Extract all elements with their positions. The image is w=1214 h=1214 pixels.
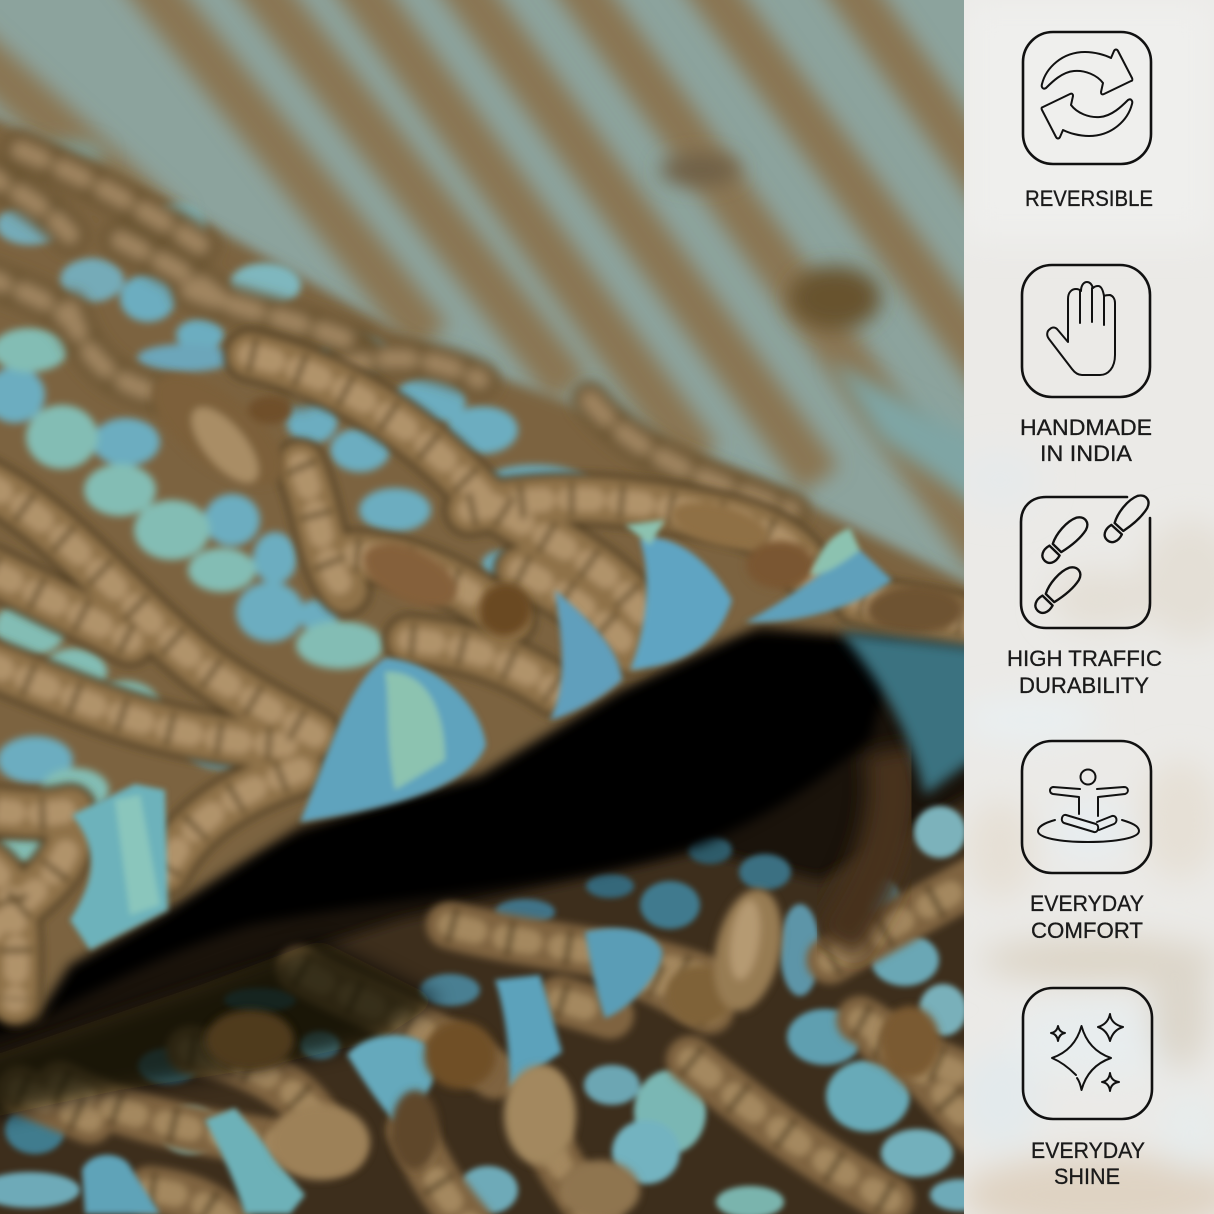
label: high traffic durability: DURABILITY <box>1019 673 1149 698</box>
label: handmade in india: HANDMADE <box>1020 415 1152 440</box>
icon: reversible arrows <box>1023 32 1151 164</box>
dark cavity under fold <box>0 630 900 1040</box>
label: high traffic durability: HIGH TRAFFIC <box>1007 646 1162 671</box>
dark brown side curl <box>835 750 894 945</box>
icon: hand <box>1022 265 1150 397</box>
label: everyday shine: EVERYDAY <box>1031 1138 1145 1163</box>
feature: everyday comfort <box>1022 741 1151 943</box>
label: everyday comfort: EVERYDAY <box>1030 891 1144 916</box>
feature: everyday shine <box>1023 988 1152 1189</box>
label: handmade in india: IN INDIA <box>1040 441 1132 466</box>
icon: footprints <box>1021 490 1153 628</box>
label: high traffic durability <box>1007 646 1162 698</box>
far jute braids <box>0 150 790 510</box>
upper jute braids <box>0 355 990 1000</box>
large teal wraps on fold edge <box>70 520 892 950</box>
label: handmade in india <box>1020 415 1152 466</box>
lower layer teal weave <box>0 806 990 1214</box>
large braid knots <box>134 354 963 636</box>
upper rug fold <box>0 110 1000 1020</box>
fold base <box>0 110 1000 1020</box>
label: everyday shine: SHINE <box>1054 1164 1120 1189</box>
lower layer dark shading <box>0 940 440 1120</box>
dark teal hanging edge <box>838 626 964 799</box>
icon: sparkles <box>1023 988 1152 1119</box>
lower layer teal wraps <box>82 928 662 1214</box>
lower tan knots <box>206 883 940 1214</box>
label: reversible: REVERSIBLE <box>1025 186 1153 211</box>
label: everyday comfort <box>1030 891 1144 943</box>
side panel background <box>960 0 1214 1214</box>
feature: handmade in india <box>1020 265 1152 466</box>
lower layer jute braids <box>20 880 975 1214</box>
feature: high traffic durability <box>1007 490 1162 698</box>
icon: seated meditation <box>1022 741 1151 873</box>
lower rug layer <box>0 750 1000 1214</box>
label: everyday shine <box>1031 1138 1145 1189</box>
blurred background weave <box>0 0 964 591</box>
feature: reversible <box>1023 32 1153 211</box>
upper teal weave <box>0 203 591 864</box>
label: everyday comfort: COMFORT <box>1031 918 1143 943</box>
